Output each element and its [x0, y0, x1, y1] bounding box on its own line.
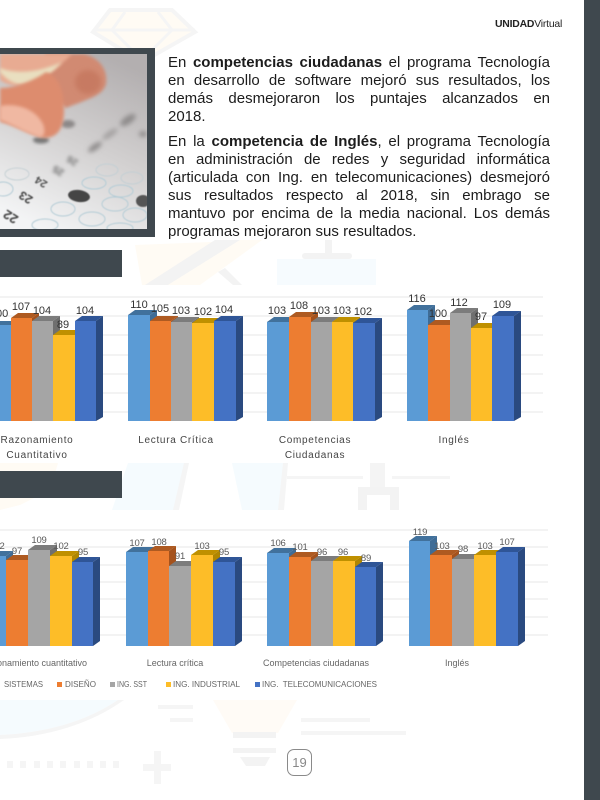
value labels: 102 [354, 306, 372, 318]
logo: Unidad Virtual: UNIDADVirtual [495, 19, 562, 30]
value labels: 104 [76, 305, 94, 317]
value labels: 103 [477, 541, 493, 552]
value labels: 103 [312, 305, 330, 317]
value labels: 96 [317, 547, 327, 558]
value labels: 103 [333, 305, 351, 317]
value labels: 97 [12, 546, 22, 557]
group: Lectura crítica [126, 546, 242, 646]
value labels: 95 [78, 547, 88, 558]
text block: competencias ciudadanas: en desarrollo de software mejoró sus resultados, los [168, 72, 550, 89]
group: Razonamiento Cuantitativo [0, 313, 103, 421]
value labels: 104 [33, 305, 51, 317]
photo: answer sheet with fingers: 26 [65, 152, 80, 168]
category labels: Lectura crítica [147, 658, 203, 668]
category labels: Inglés [445, 658, 470, 668]
category labels: Razonamiento [1, 435, 73, 446]
text block: competencia de Inglés [168, 133, 550, 240]
group: Competencias ciudadanas [267, 548, 383, 646]
value labels: 110 [130, 299, 148, 311]
photo: answer sheet with fingers: 24 [32, 173, 50, 190]
value labels: 106 [270, 538, 286, 549]
text block: competencia de Inglés: (articulada con Ing. en telecomunicaciones) desmejoró [168, 169, 550, 186]
text block: competencia de Inglés: En la competencia de Inglés, el programa Tecnología [168, 133, 550, 150]
group: Inglés [409, 536, 525, 646]
value labels: 98 [458, 544, 468, 555]
legend: ING. TELECOMUNICACIONES [262, 679, 377, 689]
value labels: 107 [499, 537, 515, 548]
value labels: 105 [151, 303, 169, 315]
value labels: 112 [450, 297, 468, 309]
value labels: 100 [429, 308, 447, 320]
value labels: 103 [194, 541, 210, 552]
page number [287, 749, 312, 776]
value labels: 102 [194, 306, 212, 318]
value labels: 101 [292, 542, 308, 553]
category labels [1, 435, 469, 461]
category labels: Cuantitativo [6, 450, 68, 461]
text block: competencias ciudadanas: demás desmejoraron los puntajes alcanzados en [168, 90, 550, 107]
photo: answer sheet with fingers: 25 [51, 162, 66, 178]
category labels: Inglés [439, 435, 469, 446]
text block: competencias ciudadanas [168, 54, 550, 125]
value labels: 108 [151, 537, 167, 548]
category labels: Ciudadanas [285, 450, 345, 461]
heading bar: chart 1 [0, 250, 122, 277]
text block: competencias ciudadanas: 2018. [168, 108, 206, 125]
text block: competencia de Inglés: en administración de redes y seguridad informática [168, 151, 550, 168]
category labels: Competencias ciudadanas [263, 658, 370, 668]
value labels: 103 [172, 305, 190, 317]
value labels: 108 [290, 300, 308, 312]
value labels [0, 527, 515, 564]
value labels: 116 [408, 293, 426, 305]
photo: answer sheet with fingers: 23 [16, 188, 35, 207]
value labels: 103 [268, 305, 286, 317]
group: Lectura Crítica [128, 310, 243, 421]
value labels: 104 [215, 304, 233, 316]
sidebar strip [584, 0, 600, 800]
text block: competencia de Inglés: sus resultados respecto al 2018, sin embrago se [168, 187, 550, 204]
legend: ING. INDUSTRIAL [173, 679, 240, 689]
group: Inglés [407, 305, 521, 421]
text block: competencia de Inglés: mantuvo por encima de la media nacional. Los demás [168, 205, 550, 222]
value labels: 91 [175, 551, 185, 562]
legend [4, 679, 377, 689]
value labels: 95 [219, 547, 229, 558]
value labels: 109 [31, 535, 47, 546]
value labels: 96 [338, 547, 348, 558]
value labels: 109 [493, 299, 511, 311]
value labels: 89 [57, 319, 69, 331]
heading bar: chart 2 [0, 471, 122, 498]
text block: competencias ciudadanas: En competencias ciudadanas el programa Tecnología [168, 54, 550, 71]
category labels: Competencias [279, 435, 351, 446]
category labels: Lectura Crítica [138, 435, 214, 446]
value labels: 103 [434, 541, 450, 552]
value labels: 97 [475, 311, 487, 323]
photo: answer sheet with fingers: 22 [1, 207, 21, 227]
group: Competencias Ciudadanas [267, 312, 382, 421]
value labels: 107 [129, 538, 145, 549]
photo: answer sheet with fingers [0, 48, 155, 237]
legend: ING. SST [117, 679, 147, 689]
page number: 19 [292, 755, 307, 770]
legend: SISTEMAS [4, 679, 43, 689]
legend: DISEÑO [65, 679, 96, 689]
value labels: 89 [361, 553, 371, 564]
value labels: 119 [413, 527, 427, 538]
value labels [0, 293, 511, 331]
value labels: 107 [12, 301, 30, 313]
category labels [0, 658, 470, 668]
group: Razonamiento cuantitativo [0, 545, 100, 646]
value labels: 102 [53, 541, 69, 552]
text block: competencia de Inglés: programas mejoraron sus resultados. [168, 223, 416, 240]
